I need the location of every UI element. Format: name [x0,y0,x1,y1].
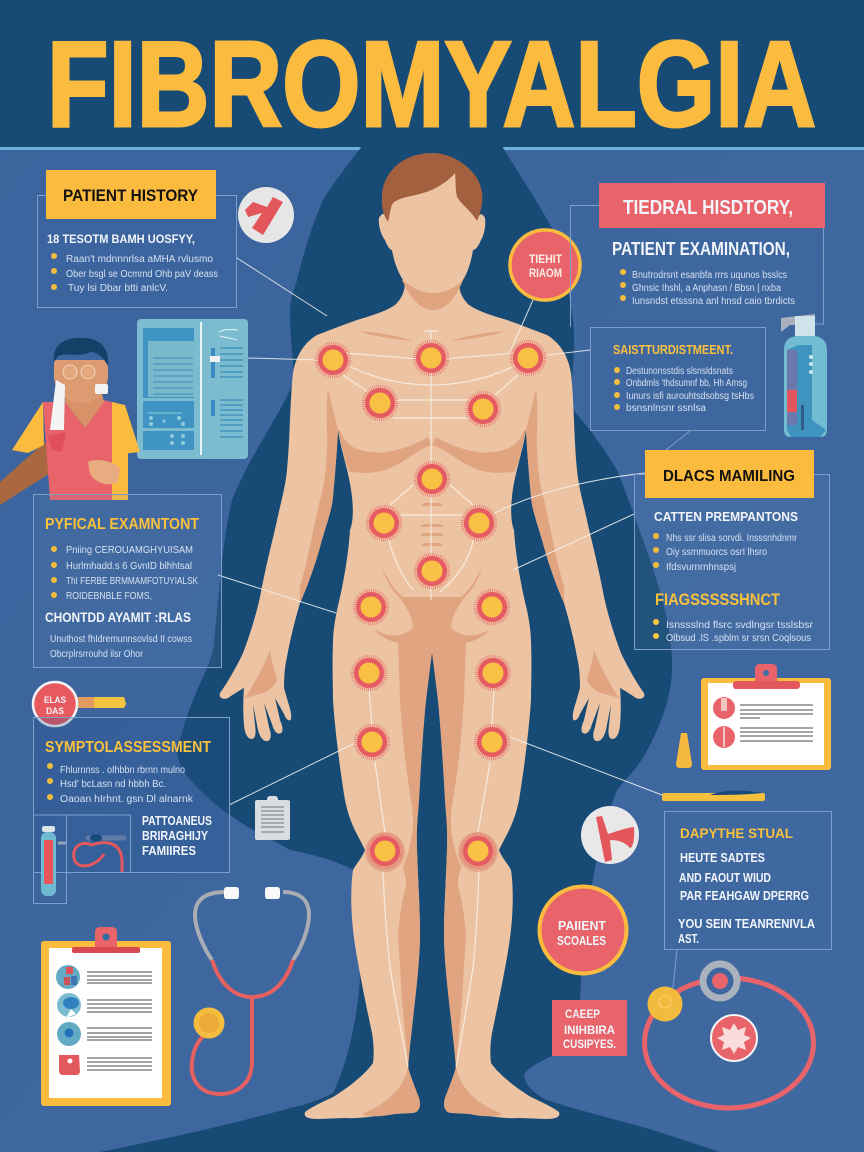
text block: Unuthost fhIdremunnsovlsd II cowss [50,634,192,645]
bullet list: Hurlmhadd.s 6 GvnID blhhtsal [66,561,192,572]
heading: SAISTTURDISTMEENT. [613,342,733,357]
badge: tender point: TIEHIT [529,254,562,266]
bullet list [653,533,798,573]
bullet list: Ifdsvurnrnhnspsj [666,562,736,573]
icon: small clipboard [255,796,290,840]
heading: symptom assessment: SYMPTOLASSESSMENT [45,739,211,756]
bullet list [653,619,814,644]
bullet list: Oiy ssmmuorcs osrI lhsro [666,547,767,558]
heading: red banner: TIEDRAL HISDTORY, [623,197,793,219]
ring diagram [644,949,814,1108]
subheading: PATIENT EXAMINATION, [612,239,790,259]
head [379,167,485,293]
icon row [56,965,81,1075]
panel: patient history [38,170,236,308]
bullet list: Destunonsstdis slsnsldsnats [626,366,733,377]
bullet list: Hsd' bcLasn nd hbbh Bc. [60,779,166,790]
bullet list: Isnssslnd flsrc svdlngsr tsslsbsr [666,620,814,631]
text block [678,850,816,946]
bullet list: Onbdmls 'thdsumnf bb, Hh Amsg [626,378,747,389]
connector to panel [666,431,690,450]
side text [142,813,212,858]
icon: red marker circle lower [581,806,639,864]
text block: PAR FEAHGAW DPERRG [680,888,809,903]
bullet list: Tuy lsi Dbar btti anlcV. [68,283,168,294]
icon: vial [41,826,66,896]
heading: patient history: PATIENT HISTORY [63,186,199,205]
subheading: 18 TESOTM BAMH UOSFYY, [47,232,195,246]
bullet list: Oaoan hIrhnt. gsn Dl alnarnk [60,794,194,805]
body nerve lines [333,331,528,1067]
red note box: CAEEP [565,1009,600,1021]
bullet list: Iunurs isfi aurouhtsdsobsg tsHbs [626,391,754,402]
text block: YOU SEIN TEANRENIVLA [678,916,816,931]
panel: assessment [590,328,766,430]
bullet list [47,763,194,805]
heading: patient history [46,170,216,219]
badge: patient scales: PAIIENT [558,919,606,933]
text block: AND FAOUT WIUD [679,870,771,885]
panel: monitor illustration [137,319,248,459]
text block: AST. [678,931,699,946]
header band [0,0,864,147]
badge: tender point: RIAOM [529,268,562,280]
subheading: CATTEN PREMPANTONS [654,509,798,524]
heading: yellow banner [645,450,814,498]
body silhouette [220,280,644,1119]
badge with probe: ELAS [44,695,66,705]
heading: red banner [599,183,825,228]
bullet list: ROIDEBNBLE FOMS, [66,591,152,602]
panel: patient examination [570,183,825,327]
pain points [316,342,544,872]
bullet list: Bnutrodrsnt esanbfa rrrs uqunos bsslcs [632,270,787,281]
heading: DAPYTHE STUAL [680,825,793,841]
panel: physical examination [34,494,222,668]
side text: FAMIIRES [142,843,196,858]
subheading: CHONTDD AYAMIT :RLAS [45,609,191,625]
right clipboard [701,664,831,770]
heading: yellow banner: DLACS MAMILING [663,468,795,485]
red note box [552,1000,627,1056]
bullet list [51,253,218,294]
icon: spray bottle [781,314,827,437]
bullet list: Ober bsgl se Ocmmd Ohb paV deass [66,269,218,280]
side text: BRIRAGHIJY [142,828,208,843]
bullet list: Olbsud .lS .spblm sr srsn Coqlsous [666,633,811,644]
text lines [87,972,152,1070]
icon: cone [676,733,692,768]
bullet list: Iunsndst etsssna anl hnsd caio tbrdicts [632,296,795,307]
dark silhouette behind figure [100,146,720,1152]
bullet list: ThI FERBE BRMMAMFOTUYIALSK [66,576,198,587]
illustration: patient holding towel [0,338,140,505]
bullet list: Fhlurnnss . oIhbbn rbrnn mulno [60,765,185,776]
bullet list: Nhs ssr slisa sorvdi. Insssnhdnmr [666,533,798,544]
hair [382,153,482,222]
panel: diagnostic mailing [634,450,830,650]
large clipboard [41,927,171,1106]
bullet list [620,269,795,307]
bullet list: bsnsnlnsnr ssnlsa [626,403,706,414]
text block: HEUTE SADTES [680,850,765,865]
panel: symptom assessment [34,718,230,904]
bullet list [614,366,754,414]
red note box: INIHBIRA [564,1025,615,1037]
bullet list: Pniing CEROUAMGHYUISAM [66,545,193,556]
badge: tender point [510,230,580,300]
icon: red marker circle [238,187,294,243]
bullet list: Ghnsic Ihshl, a Anphasn / Bbsn | nxba [632,283,781,294]
heading: physical exam: PYFICAL EXAMNTONT [45,516,199,533]
subheading: yellow: FIAGSSSSSHNCT [655,590,781,609]
panel: daytime status [664,812,832,950]
bullet list [51,545,198,602]
inner frames [34,815,130,904]
connector lines [218,258,662,805]
icon: pen [662,791,765,801]
badge with probe [33,682,126,726]
badge: patient scales [540,886,626,974]
text block [50,634,192,660]
bullet list: Raan't mdnnnrlsa aMHA rvlusmo [66,254,213,265]
stethoscope [192,887,309,1094]
human body figure [220,153,644,1119]
text block: Obcrplrsrrouhd ilsr Ohor [50,649,144,660]
red note box: CUSIPYES. [563,1039,616,1051]
side text: PATTOANEUS [142,813,212,828]
badge: patient scales: SCOALES [557,934,606,948]
badge with probe: DAS [46,706,64,716]
body shading [245,280,619,1116]
icon: tube [74,834,124,872]
